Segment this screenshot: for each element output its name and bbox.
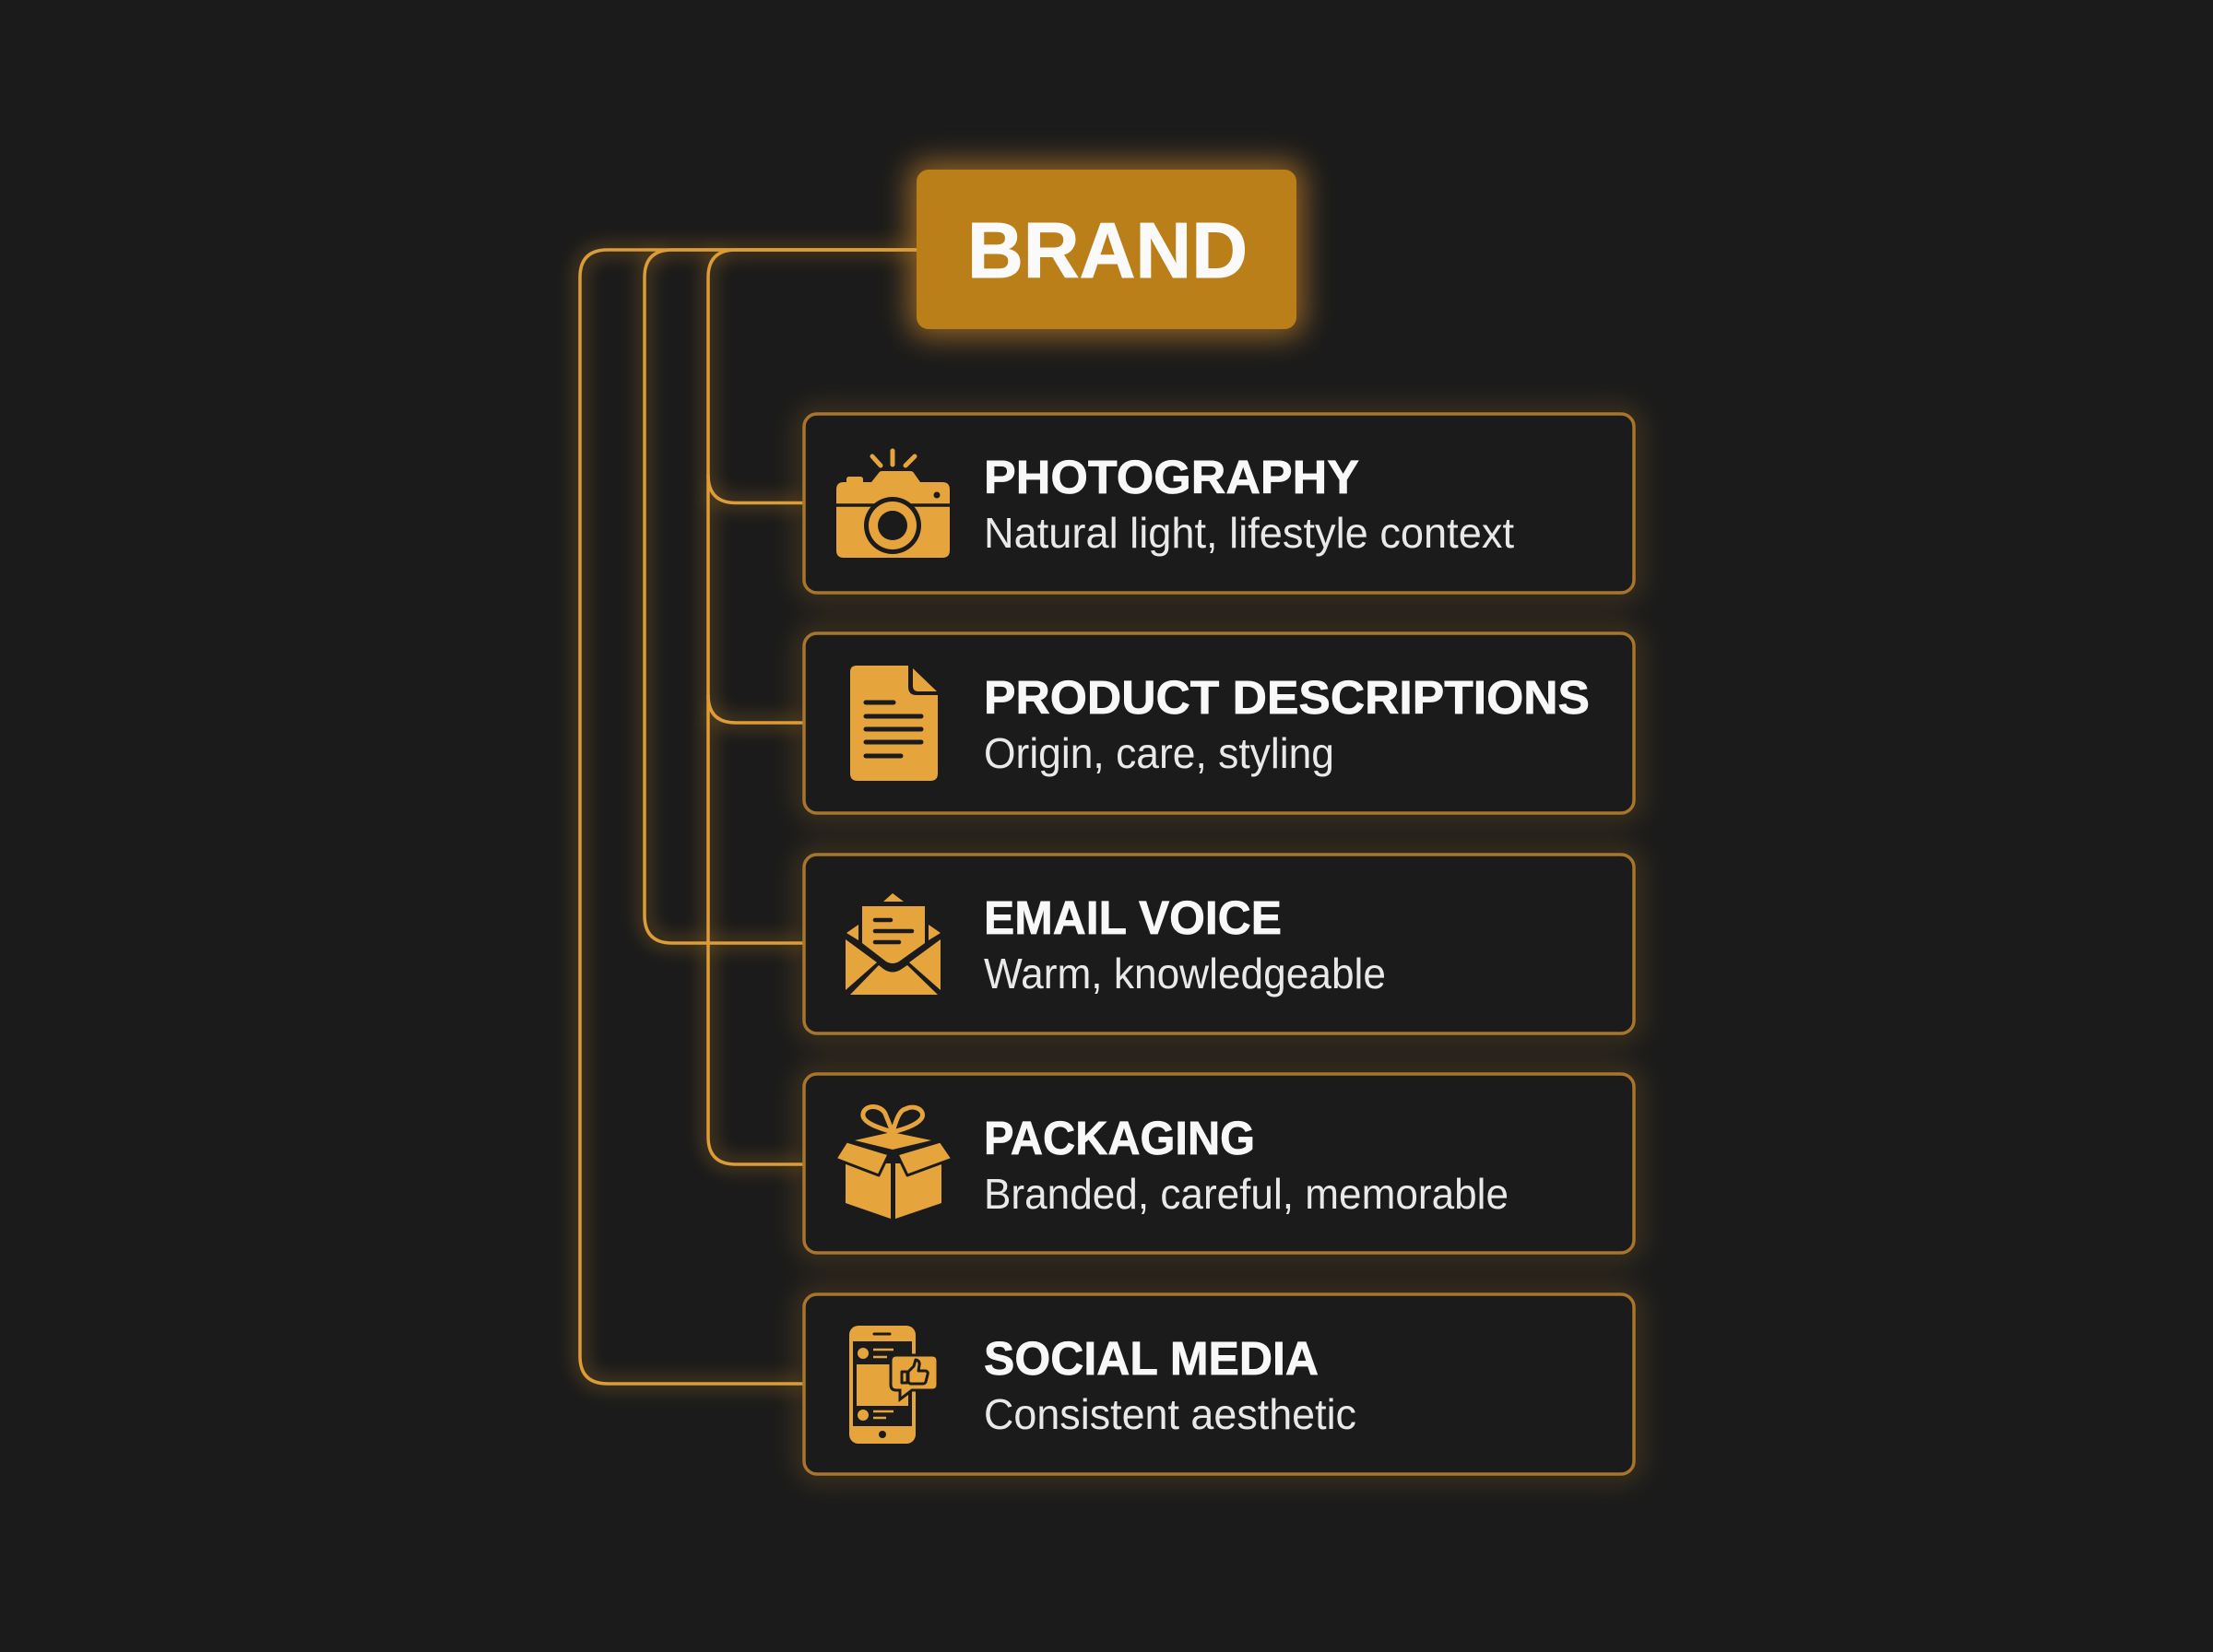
heading: brand: BRAND [967, 207, 1248, 295]
icon: document [850, 666, 938, 781]
icon: gift box [835, 1106, 953, 1219]
title: photography: PHOTOGRAPHY [984, 451, 1359, 503]
connector lines from brand to cards [580, 250, 917, 1384]
connector glow [580, 250, 917, 1384]
icon: phone with like bubble [849, 1326, 938, 1444]
subtitle: photography: Natural light, lifestyle context [984, 509, 1514, 557]
subtitle: email voice: Warm, knowledgeable [984, 950, 1386, 997]
subtitle: packaging: Branded, careful, memorable [984, 1170, 1509, 1218]
title: email voice: EMAIL VOICE [984, 891, 1282, 944]
card glow [804, 414, 1634, 1474]
title: packaging: PACKAGING [984, 1112, 1255, 1164]
brand node [917, 170, 1296, 329]
brand glow [909, 162, 1304, 336]
icon: envelope [846, 893, 941, 995]
panel: photography [804, 414, 1634, 593]
panel: packaging [804, 1074, 1634, 1253]
icon: camera [836, 451, 950, 558]
panel: product descriptions [804, 633, 1634, 813]
subtitle: product descriptions: Origin, care, styling [984, 729, 1334, 777]
title: product descriptions: PRODUCT DESCRIPTIONS [984, 671, 1590, 724]
subtitle: social media: Consistent aesthetic [984, 1390, 1356, 1438]
title: social media: SOCIAL MEDIA [984, 1332, 1319, 1385]
panel: email voice [804, 855, 1634, 1033]
panel: social media [804, 1294, 1634, 1474]
